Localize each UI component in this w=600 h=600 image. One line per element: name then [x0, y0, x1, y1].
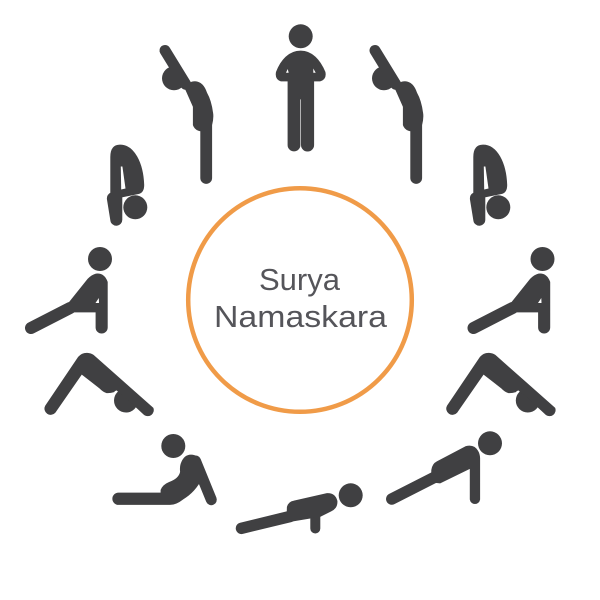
title: Surya	[259, 262, 341, 297]
pose 11: right forward fold	[470, 145, 510, 225]
title: Namaskara	[214, 299, 388, 334]
pose 1: standing, palms together	[276, 24, 325, 151]
pose 9: right lunge	[474, 247, 554, 333]
pose 8: upward plank	[392, 431, 502, 504]
pose 2: left side backward bend	[162, 50, 213, 184]
pose 5: left downward dog	[45, 353, 153, 416]
pose 3: left forward fold	[107, 145, 147, 225]
pose 7: low plank	[242, 483, 363, 528]
title	[214, 262, 388, 334]
pose 10: right downward dog	[447, 353, 555, 416]
center orange ring	[188, 188, 412, 412]
pose 6: cobra	[113, 434, 211, 504]
pose 12: right side backward bend	[372, 50, 423, 184]
pose 4: left lunge	[31, 247, 112, 333]
